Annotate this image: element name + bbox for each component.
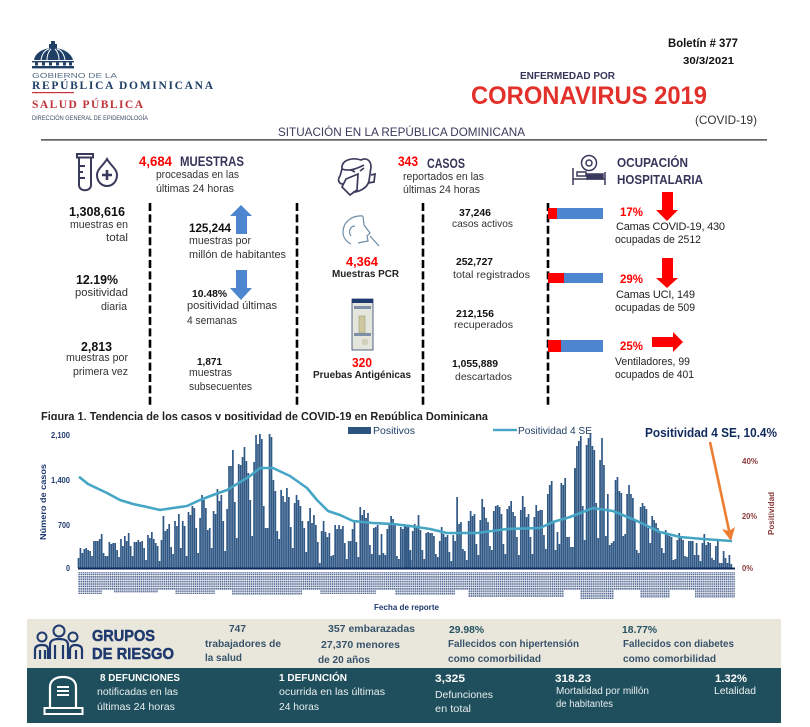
stat: total registrados: 252,727 (456, 256, 493, 268)
line: 4-week positivity (79, 468, 732, 541)
stat: defunción ocurrida (279, 671, 385, 713)
stat: muestras por millón: millón de habitantes (189, 249, 286, 261)
stat: PCR samples: Muestras PCR (332, 268, 399, 280)
legend: Positividad 4 SE (518, 426, 592, 437)
stat: positividad 4 semanas: positividad últimas (187, 300, 278, 312)
stat: recuperados: 212,156 (456, 308, 494, 320)
x axis baseline (78, 568, 735, 570)
chart: positive cases and 4-week positivity (38, 425, 777, 612)
arrow: red down (656, 192, 678, 221)
icon: group of people (35, 626, 82, 659)
icon: antigen test cassette (352, 299, 373, 350)
stat: PCR samples: 4,364 (346, 254, 379, 269)
figure title: Figura 1. Tendencia de los casos y positividad de COVID-19 en República Dominicana (41, 412, 489, 424)
icon: tombstone (44, 677, 82, 714)
logo: government of Dominican Republic: GOBIERNO DE LA (32, 71, 117, 80)
stat: positividad 4 semanas: 10.48% (192, 288, 228, 300)
stat: descartados: descartados (455, 371, 512, 383)
bar: camas covid occupancy (548, 208, 603, 219)
left axis: Número de casos (38, 464, 48, 540)
stat: ventiladores: Ventiladores, 99 (615, 356, 690, 368)
x axis date labels (78, 572, 735, 599)
heading: casos: CASOS (427, 156, 465, 171)
stat: muestras por primera vez: primera vez (73, 366, 128, 378)
stat: embarazadas and minors: 27,370 menores (321, 639, 400, 651)
stat: positividad diaria: positividad (75, 287, 128, 299)
stat: muestras por primera vez: 2,813 (81, 340, 112, 354)
heading: casos: últimas 24 horas (403, 184, 480, 196)
logo: government of Dominican Republic: SALUD PÚBLICA (32, 97, 144, 111)
stat: muestras subsecuentes (189, 356, 252, 393)
stat: positividad diaria (75, 273, 128, 313)
stat: positividad diaria: diaria (101, 301, 128, 313)
title: (COVID-19) (695, 113, 757, 127)
bar: camas uci occupancy (548, 273, 603, 283)
right axis (742, 457, 776, 573)
stat: recuperados (454, 308, 513, 331)
stat: defunciones en total: Defunciones (435, 689, 493, 701)
panel: casos (313, 154, 530, 383)
heading: grupos de riesgo: DE RIESGO (92, 646, 174, 663)
stat: diabetes (622, 624, 734, 665)
stat: camas covid (615, 205, 725, 246)
bulletin number and date: 30/3/2021 (683, 55, 734, 67)
icon: test tube and blood drop (77, 154, 117, 190)
stat: diabetes: Fallecidos con diabetes (623, 638, 734, 650)
stat: diabetes: como comorbilidad (623, 653, 716, 665)
callout: positivity 10.4% (645, 425, 777, 541)
stat: muestras por millón: 125,244 (189, 221, 231, 235)
stat: positividad 4 semanas: 4 semanas (187, 315, 237, 327)
heading: muestras (139, 154, 244, 195)
stat: mortalidad (555, 673, 649, 710)
stat: defunciones en total: en total (435, 703, 471, 715)
logo: government of Dominican Republic (32, 41, 214, 122)
title (471, 70, 757, 127)
stat: casos activos (452, 207, 513, 230)
stat: camas uci: Camas UCI, 149 (616, 289, 695, 301)
panel: grupos de riesgo (27, 619, 781, 668)
stat: total registrados: total registrados (453, 269, 530, 281)
section heading: SITUACIÓN EN LA REPÚBLICA DOMINICANA (278, 124, 525, 139)
logo: government of Dominican Republic: REPÚBLICA DOMINICANA (32, 78, 214, 92)
stat: muestras por primera vez: muestras por (66, 352, 128, 364)
stat: camas uci (615, 272, 695, 314)
arrow: red right (652, 332, 683, 352)
stat: muestras por primera vez (66, 340, 128, 378)
stat: hipertensión (448, 624, 579, 665)
stat: mortalidad: 318.23 (555, 673, 591, 685)
stat: defunciones 24 horas: 8 DEFUNCIONES (100, 672, 180, 684)
stat: letalidad (714, 673, 756, 697)
stat: defunción ocurrida: 24 horas (279, 701, 319, 713)
right axis: 20% (742, 512, 757, 521)
bars: daily positive cases (78, 433, 731, 568)
stat: embarazadas and minors: 357 embarazadas (328, 623, 415, 635)
icon: face with mask (339, 159, 375, 195)
arrow: down (230, 270, 252, 300)
title: CORONAVIRUS 2019 (471, 82, 707, 110)
bulletin number and date (668, 38, 738, 67)
stat: antigen tests: Pruebas Antigénicas (313, 369, 411, 381)
heading: ocupación (617, 155, 704, 187)
heading: muestras: 4,684 (139, 154, 172, 169)
heading: casos (398, 154, 484, 196)
stat: recuperados: recuperados (454, 319, 513, 331)
stat: muestras en total: muestras en (70, 219, 128, 231)
stat: trabajadores de la salud: 747 (229, 623, 246, 635)
stat: antigen tests (313, 355, 411, 381)
x axis title: Fecha de reporte (374, 603, 440, 612)
left axis: 0 (66, 564, 70, 573)
heading: muestras: MUESTRAS (180, 154, 244, 169)
stat: antigen tests: 320 (352, 355, 372, 370)
stat: defunciones en total (435, 673, 493, 715)
heading: ocupación: HOSPITALARIA (617, 172, 704, 187)
legend: Positivos (373, 426, 415, 437)
stat: muestras subsecuentes: 1,871 (197, 356, 222, 368)
stat: defunciones 24 horas: notificadas en las (97, 686, 178, 698)
stat: defunción ocurrida: ocurrida en las últimas (279, 686, 385, 698)
stat: defunciones 24 horas (97, 672, 180, 713)
stat: muestras subsecuentes: subsecuentes (189, 381, 252, 393)
arrow: up (230, 205, 252, 234)
left axis: 2,100 (51, 431, 71, 440)
stat: camas uci: ocupadas de 509 (615, 302, 695, 314)
callout: positivity 10.4%: Positividad 4 SE, 10.4% (645, 425, 777, 440)
bar: ventiladores occupancy (548, 340, 603, 352)
stat: camas covid: ocupadas de 2512 (615, 234, 701, 246)
stat: diabetes: 18.77% (622, 624, 658, 636)
heading: grupos de riesgo: GRUPOS (92, 628, 155, 645)
left axis: 700 (58, 521, 70, 530)
bulletin number and date: Boletín # 377 (668, 38, 738, 50)
stat: muestras por millón: muestras por (189, 235, 251, 247)
icon: PCR nasal swab (343, 216, 379, 246)
left axis: 1,400 (51, 476, 71, 485)
icon: dome (32, 41, 74, 68)
stat: camas uci: 29% (620, 272, 643, 286)
stat: ventiladores: 25% (620, 339, 643, 353)
stat: embarazadas and minors (318, 623, 415, 666)
stat: camas covid: 17% (620, 205, 643, 219)
heading: muestras: últimas 24 horas (156, 183, 234, 195)
heading: casos: 343 (398, 154, 418, 169)
stat: mortalidad: Mortalidad por millón (556, 686, 649, 697)
heading: casos: reportados en las (403, 171, 484, 183)
stat: embarazadas and minors: de 20 años (318, 654, 370, 666)
stat: positividad 4 semanas (187, 288, 278, 327)
stat: descartados (452, 358, 512, 383)
stat: total registrados (453, 256, 530, 281)
stat: camas covid: Camas COVID-19, 430 (616, 221, 725, 233)
stat: defunción ocurrida: 1 DEFUNCIÓN (279, 671, 347, 684)
stat: casos activos: 37,246 (459, 207, 491, 219)
right axis: 0% (742, 564, 753, 573)
stat: hipertensión: Fallecidos con hipertensión (448, 638, 579, 650)
stat: defunciones 24 horas: últimas 24 horas (97, 701, 175, 713)
icon: hospital bed with virus (573, 156, 605, 185)
legend (348, 426, 592, 437)
stat: muestras en total: total (106, 232, 128, 244)
stat: muestras en total (69, 205, 128, 244)
stat: ventiladores: ocupados de 401 (615, 369, 694, 381)
stat: muestras por millón (189, 221, 286, 261)
stat: trabajadores de la salud (205, 623, 281, 664)
stat: trabajadores de la salud: trabajadores de (205, 638, 281, 650)
stat: mortalidad: de habitantes (556, 699, 613, 710)
left axis (38, 431, 71, 573)
stat: muestras subsecuentes: muestras (189, 367, 232, 379)
stat: hipertensión: como comorbilidad (448, 653, 541, 665)
arrow: red down (656, 258, 678, 288)
right axis: Positividad (767, 492, 776, 535)
stat: descartados: 1,055,889 (452, 358, 498, 370)
stat: ventiladores (615, 339, 694, 381)
heading: grupos de riesgo (92, 628, 174, 663)
heading: muestras: procesadas en las (156, 169, 239, 181)
title: ENFERMEDAD POR (520, 70, 615, 82)
stat: letalidad: 1.32% (715, 673, 747, 685)
stat: defunciones en total: 3,325 (435, 673, 465, 685)
stat: muestras en total: 1,308,616 (69, 205, 125, 219)
stat: letalidad: Letalidad (714, 685, 756, 697)
heading: ocupación: OCUPACIÓN (617, 155, 688, 170)
panel: defunciones (27, 668, 781, 723)
logo: government of Dominican Republic: DIRECCIÓN GENERAL DE EPIDEMIOLOGÍA (32, 115, 148, 122)
right axis: 40% (742, 457, 758, 466)
stat: trabajadores de la salud: la salud (205, 652, 242, 664)
stat: casos activos: casos activos (452, 218, 513, 230)
stat: hipertensión: 29.98% (449, 624, 485, 636)
panel: ocupación hospitalaria (548, 155, 725, 381)
panel: muestras (66, 154, 286, 393)
stat: positividad diaria: 12.19% (76, 273, 118, 287)
stat: PCR samples (332, 254, 399, 280)
